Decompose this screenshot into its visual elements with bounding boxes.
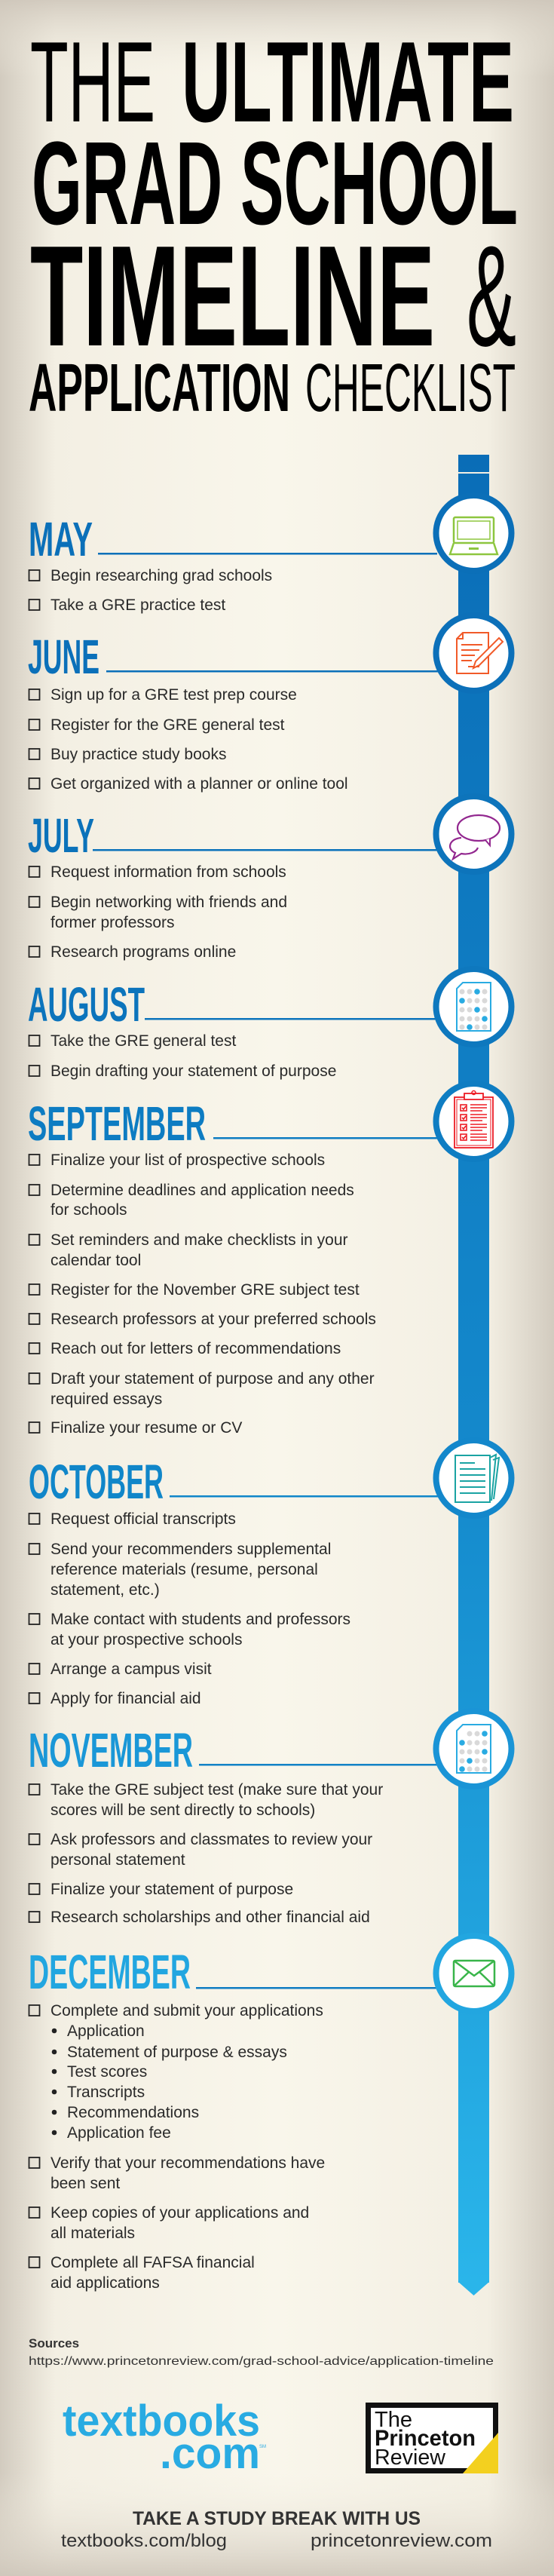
checklist: November: Finalize your statement of purpose xyxy=(51,1881,293,1898)
checklist: September: Research professors at your preferred schools xyxy=(51,1311,376,1328)
logo: textbooks.com: SM xyxy=(259,2445,266,2449)
heading: AUGUST: AUGUST xyxy=(28,977,145,1032)
section: SEPTEMBER xyxy=(28,1084,511,1437)
checklist: October: Request official transcripts xyxy=(51,1510,236,1528)
checklist: September: Reach out for letters of recommendations xyxy=(51,1340,341,1357)
checklist: August: Begin drafting your statement of purpose xyxy=(51,1063,336,1080)
sources: https://www.princetonreview.com/grad-school-advice/application-timeline xyxy=(29,2355,494,2368)
footer call to action xyxy=(61,2508,492,2551)
checklist: June: Sign up for a GRE test prep course xyxy=(51,686,297,704)
checklist: August: Take the GRE general test xyxy=(51,1032,236,1050)
heading: JULY: JULY xyxy=(28,808,94,863)
checklist: December: Recommendations xyxy=(67,2104,199,2121)
checklist: June: Get organized with a planner or online tool xyxy=(51,775,348,793)
checklist: May: Take a GRE practice test xyxy=(51,596,225,614)
sources: Sources xyxy=(29,2336,79,2351)
checklist: July: Request information from schools xyxy=(51,863,286,881)
icon: envelope xyxy=(436,1936,511,2011)
checklist: September: Set reminders and make checklists in your xyxy=(51,1231,348,1249)
checklist: November: Take the GRE subject test (make sure that your xyxy=(51,1781,383,1799)
checklist: November: personal statement xyxy=(51,1851,185,1869)
checklist: November: Ask professors and classmates to review your xyxy=(51,1831,372,1848)
checklist: December: been sent xyxy=(51,2175,120,2192)
title: APPLICATION xyxy=(29,351,290,426)
checklist: July: Research programs online xyxy=(51,943,236,961)
section: JUNE xyxy=(28,615,511,793)
checklist: June: Register for the GRE general test xyxy=(51,716,285,734)
checklist: September: Determine deadlines and application needs xyxy=(51,1182,354,1199)
footer call to action: textbooks.com/blog xyxy=(61,2531,227,2551)
heading: JUNE: JUNE xyxy=(28,630,99,684)
logo: The Princeton Review: The xyxy=(375,2408,412,2432)
checklist: June: Buy practice study books xyxy=(51,746,226,763)
checklist: December xyxy=(29,2002,325,2292)
checklist: October: statement, etc.) xyxy=(51,1581,160,1599)
checklist: December: Complete and submit your applications xyxy=(51,2002,323,2019)
checklist: December: Verify that your recommendations have xyxy=(51,2154,325,2172)
section: NOVEMBER xyxy=(29,1711,511,1926)
checklist: October: reference materials (resume, personal xyxy=(51,1561,318,1578)
checklist: July: Begin networking with friends and xyxy=(51,894,287,911)
checklist: December: Application fee xyxy=(67,2124,171,2142)
icon: answer sheet xyxy=(436,1711,511,1786)
heading: MAY: MAY xyxy=(29,512,93,566)
checklist: May xyxy=(29,567,272,614)
checklist: September: Finalize your resume or CV xyxy=(51,1419,242,1437)
checklist: September: for schools xyxy=(51,1201,127,1219)
icon: speech bubbles xyxy=(436,796,511,872)
checklist: September: Register for the November GRE subject test xyxy=(51,1281,360,1299)
checklist: October: Arrange a campus visit xyxy=(51,1661,212,1678)
checklist: September: required essays xyxy=(51,1391,162,1408)
logo: The Princeton Review: Princeton xyxy=(375,2426,476,2451)
logo: The Princeton Review: Review xyxy=(375,2446,446,2470)
checklist: November: scores will be sent directly to schools) xyxy=(51,1802,315,1819)
checklist: October: Send your recommenders supplemental xyxy=(51,1541,331,1558)
checklist: August xyxy=(29,1032,336,1080)
checklist: July: former professors xyxy=(51,914,175,931)
section: JULY xyxy=(28,796,511,961)
logo: The Princeton Review xyxy=(366,2403,498,2473)
checklist: November xyxy=(29,1781,383,1926)
checklist: October: Apply for financial aid xyxy=(51,1690,201,1707)
checklist: October: Make contact with students and professors xyxy=(51,1611,350,1628)
section: DECEMBER xyxy=(29,1936,511,2292)
checklist: September: Draft your statement of purpose and any other xyxy=(51,1370,375,1388)
icon: clipboard xyxy=(436,1084,511,1159)
icon: document stack xyxy=(436,1440,511,1516)
checklist: December: aid applications xyxy=(51,2274,160,2292)
checklist: December: Statement of purpose & essays xyxy=(67,2044,287,2061)
checklist: December: Keep copies of your applications and xyxy=(51,2204,309,2222)
checklist: December: Application xyxy=(67,2022,145,2040)
checklist: September xyxy=(29,1152,376,1437)
logo: textbooks.com xyxy=(63,2397,266,2478)
icon: answer sheet xyxy=(436,969,511,1044)
checklist: September: Finalize your list of prospective schools xyxy=(51,1152,325,1169)
checklist: December: Test scores xyxy=(67,2063,147,2081)
checklist: October xyxy=(29,1510,350,1707)
logo: textbooks.com: textbooks xyxy=(63,2397,260,2446)
timeline bar xyxy=(458,455,489,2295)
checklist: October: at your prospective schools xyxy=(51,1631,242,1648)
icon: laptop xyxy=(436,495,511,571)
title: THE xyxy=(30,18,155,146)
logo: textbooks.com: .com xyxy=(160,2429,260,2478)
heading: DECEMBER: DECEMBER xyxy=(29,1945,191,1999)
checklist: June xyxy=(29,686,348,793)
checklist: September: calendar tool xyxy=(51,1252,141,1269)
heading: OCTOBER: OCTOBER xyxy=(29,1455,164,1509)
section: MAY xyxy=(29,495,511,614)
icon: document and pencil xyxy=(436,615,511,691)
footer call to action: TAKE A STUDY BREAK WITH US xyxy=(133,2508,421,2529)
sources xyxy=(29,2336,494,2368)
checklist: December: Transcripts xyxy=(67,2084,145,2101)
section: AUGUST xyxy=(28,969,511,1080)
title xyxy=(29,18,518,426)
checklist: December: Complete all FAFSA financial xyxy=(51,2254,255,2271)
checklist: May: Begin researching grad schools xyxy=(51,567,272,584)
footer call to action: princetonreview.com xyxy=(311,2531,492,2551)
heading: NOVEMBER: NOVEMBER xyxy=(29,1723,193,1777)
heading: SEPTEMBER: SEPTEMBER xyxy=(28,1096,206,1151)
section: OCTOBER xyxy=(29,1440,511,1707)
checklist: December: all materials xyxy=(51,2225,135,2242)
checklist: November: Research scholarships and other financial aid xyxy=(51,1909,370,1926)
checklist: July xyxy=(29,863,287,961)
